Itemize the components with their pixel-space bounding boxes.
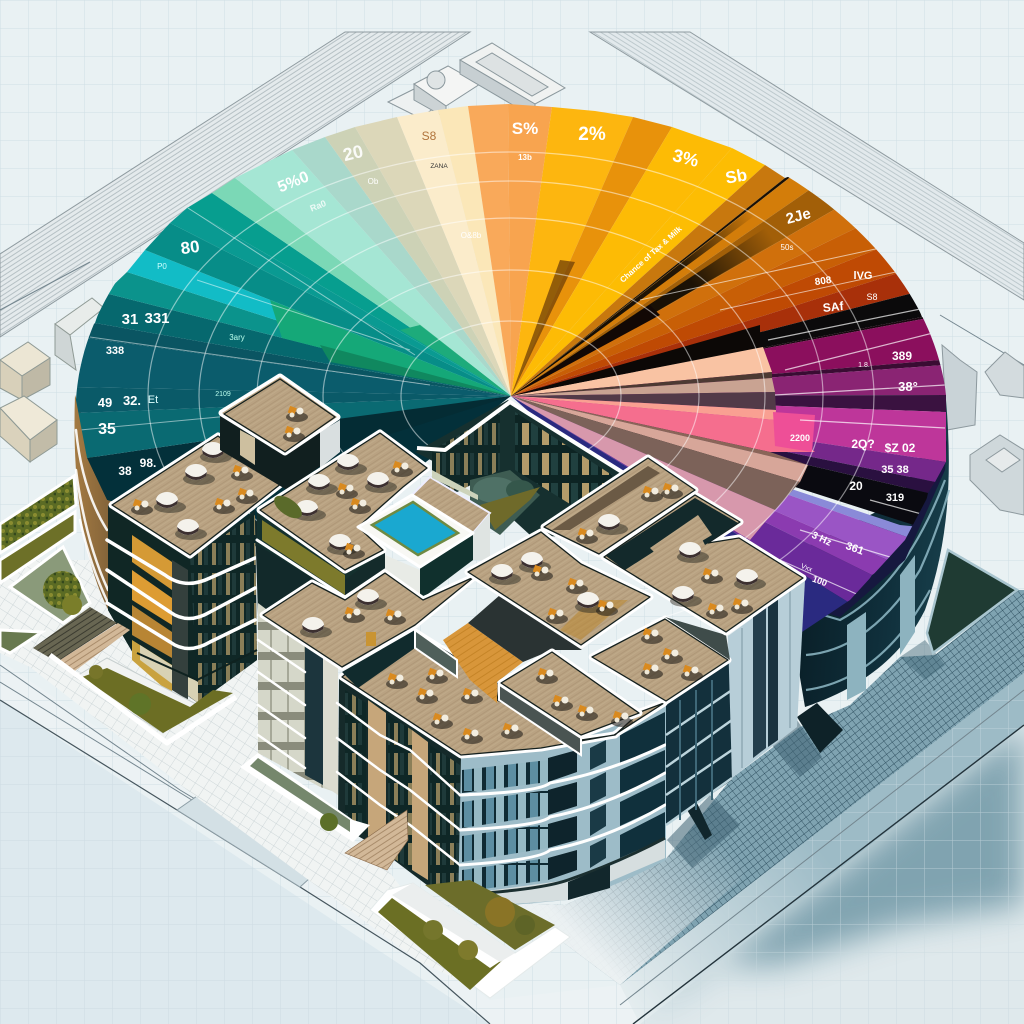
fan wedges: teal side <box>76 106 511 560</box>
fan labels: warm side: 2Q? <box>851 437 875 451</box>
pool water <box>372 502 458 555</box>
deck D <box>468 532 650 645</box>
ground strip hatched <box>177 787 330 887</box>
fan labels: teal side: 3ary <box>229 333 245 342</box>
fan wedges: magenta and purple side <box>511 317 946 650</box>
fan labels: teal side: Ra0 <box>309 198 328 214</box>
fan labels: warm side: SAf <box>822 299 845 315</box>
ring lines <box>80 152 945 640</box>
fan labels: teal side: S8 <box>422 129 437 143</box>
left ground paving <box>0 560 480 990</box>
fan labels: warm side: 3 Hz <box>810 530 833 549</box>
fan wedges: orange side <box>468 104 922 396</box>
fan labels: warm side: 13b <box>518 153 532 162</box>
fan labels: teal side: ZANA <box>430 163 448 170</box>
fan labels: teal side: 5%0 <box>275 168 312 196</box>
pool block <box>358 470 490 600</box>
fan labels: warm side: 2% <box>578 124 606 145</box>
fan labels: warm side: 35 38 <box>881 464 909 476</box>
fan labels: warm side: 1.8. <box>858 362 870 369</box>
right glass facade <box>666 660 732 825</box>
fan labels: teal side: 38 <box>118 464 132 478</box>
fan labels: warm side: S% <box>512 119 538 138</box>
fan labels: teal side: 338 <box>106 345 124 357</box>
middle roof deck <box>260 433 427 570</box>
front curved facade <box>457 703 666 910</box>
fan labels: teal side: 20 <box>341 141 365 165</box>
fan labels: teal side: 35 <box>98 421 116 438</box>
fan labels: warm side: 2Je <box>784 205 813 228</box>
fan labels: warm side: 20 <box>849 479 863 493</box>
fan labels: warm side: 100 <box>811 574 828 588</box>
tree planter: left <box>10 547 90 623</box>
fan labels: teal side: O&8b <box>461 231 482 240</box>
right tower <box>728 580 805 778</box>
fan labels: teal side: P0 <box>157 262 167 271</box>
fan labels: warm side: $Z 02 <box>885 441 916 455</box>
drum wall: left <box>74 395 150 613</box>
courtyard floor <box>443 623 523 703</box>
fan labels: warm side: 389 <box>892 349 912 363</box>
deck F <box>604 495 803 632</box>
fan labels: warm side: Vxx <box>800 563 814 574</box>
front planter <box>370 880 570 998</box>
middle block walls <box>257 510 385 600</box>
fan labels: warm side: 2200 <box>790 433 810 443</box>
fan labels: teal side: 32. <box>123 393 141 408</box>
roof furniture: left tower <box>131 442 258 540</box>
left tower <box>107 505 257 703</box>
distant buildings: right <box>942 345 1024 515</box>
green strips: left <box>0 476 76 583</box>
dark inner walls <box>342 595 582 755</box>
fan labels: teal side: 2109 <box>215 391 231 398</box>
drum wall: right <box>780 400 949 707</box>
lower left block wall <box>258 603 338 795</box>
distant buildings: top <box>388 43 565 118</box>
fan labels: teal side: 331 <box>144 310 170 327</box>
dark glass under middle block <box>255 520 345 615</box>
ground paving: shaded right <box>430 590 1024 985</box>
deck G <box>592 617 730 701</box>
deck E <box>544 458 695 554</box>
fan labels: warm side: Sb <box>724 165 749 188</box>
front left wall <box>337 677 461 910</box>
dark streak overlays <box>270 212 770 422</box>
small rooftop block <box>220 377 340 490</box>
roof furniture: front deck <box>386 668 523 744</box>
fan labels: warm side: S8 <box>866 292 878 302</box>
deck H <box>501 652 639 735</box>
stair patches <box>667 640 945 868</box>
fan labels: teal side <box>98 129 482 478</box>
fan labels: warm side: 361 <box>844 540 865 558</box>
fan labels: teal side: 31 <box>122 311 138 328</box>
fan labels: warm side: 319 <box>886 492 904 504</box>
fan chart <box>76 104 946 650</box>
fan labels: warm side <box>512 119 918 588</box>
fan labels: warm side: 808 <box>814 275 833 288</box>
lower left platform deck <box>263 573 474 667</box>
left tower roof <box>112 436 282 555</box>
fan labels: teal side: 80 <box>179 237 201 258</box>
site outlines <box>0 262 1024 1024</box>
fan labels: warm side: 50s <box>781 243 793 252</box>
fan labels: warm side: 38° <box>898 379 918 394</box>
back wing of building <box>415 400 622 540</box>
green bed: right <box>927 550 1017 653</box>
fan labels: warm side: lVG <box>854 270 872 282</box>
fan labels: teal side: Et <box>148 394 158 406</box>
peach inner section <box>511 347 815 540</box>
front left planter <box>240 753 370 842</box>
road strip: top left <box>0 32 470 337</box>
front central deck <box>342 632 664 755</box>
fan labels: warm side: Chance of Tax & Milk <box>618 224 684 284</box>
road strip: top right <box>590 32 1024 300</box>
steps: left <box>33 607 130 673</box>
fan labels: warm side: 3% <box>671 145 701 171</box>
entry stairs <box>345 810 408 870</box>
fan labels: teal side: Ob <box>368 177 379 186</box>
left lower planter <box>50 655 236 743</box>
fan labels: teal side: 49 <box>98 395 112 410</box>
fan labels: teal side: 98. <box>140 456 156 470</box>
roof furniture: middle block <box>270 454 413 559</box>
small planter: left <box>0 630 42 653</box>
distant buildings: left <box>0 298 104 462</box>
courtyard shrubs <box>473 477 540 530</box>
